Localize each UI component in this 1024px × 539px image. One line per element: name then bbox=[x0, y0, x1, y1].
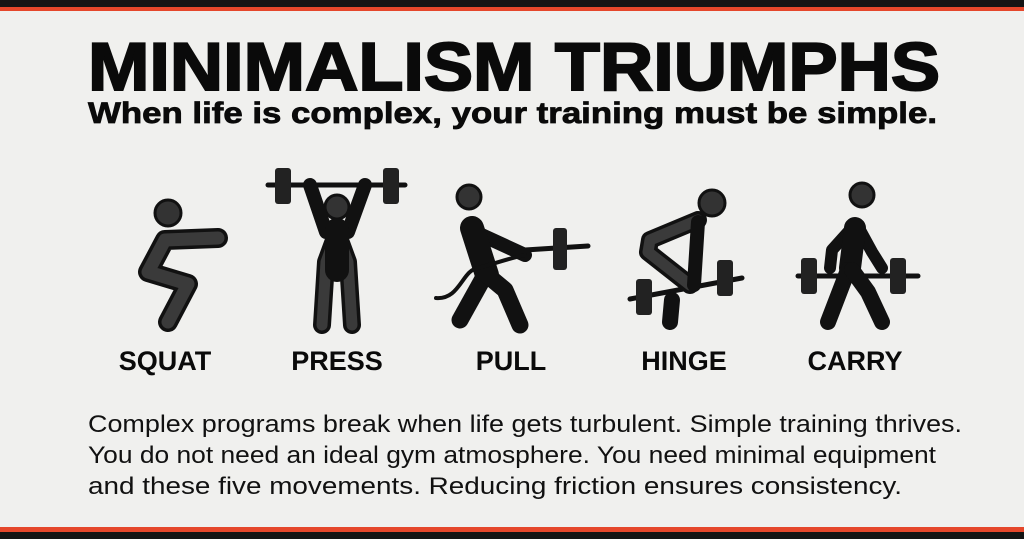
title: MINIMALISM TRIUMPHS bbox=[88, 29, 940, 105]
labels: PRESS bbox=[291, 346, 383, 376]
icon: carry bbox=[798, 183, 918, 322]
subtitle: When life is complex, your training must be simple. bbox=[88, 97, 937, 130]
body text bbox=[88, 411, 962, 500]
labels bbox=[119, 346, 903, 376]
body text: You do not need an ideal gym atmosphere. You need minimal equipment bbox=[88, 442, 936, 469]
labels: SQUAT bbox=[119, 346, 212, 376]
icon: hinge bbox=[630, 190, 742, 322]
icon: pull bbox=[436, 185, 588, 325]
labels: CARRY bbox=[807, 346, 903, 376]
labels: PULL bbox=[476, 346, 546, 376]
body text: Complex programs break when life gets turbulent. Simple training thrives. bbox=[88, 411, 962, 438]
icon: press bbox=[268, 168, 405, 325]
labels: HINGE bbox=[641, 346, 727, 376]
body text: and these five movements. Reducing friction ensures consistency. bbox=[88, 473, 902, 500]
icon: squat bbox=[148, 200, 218, 322]
